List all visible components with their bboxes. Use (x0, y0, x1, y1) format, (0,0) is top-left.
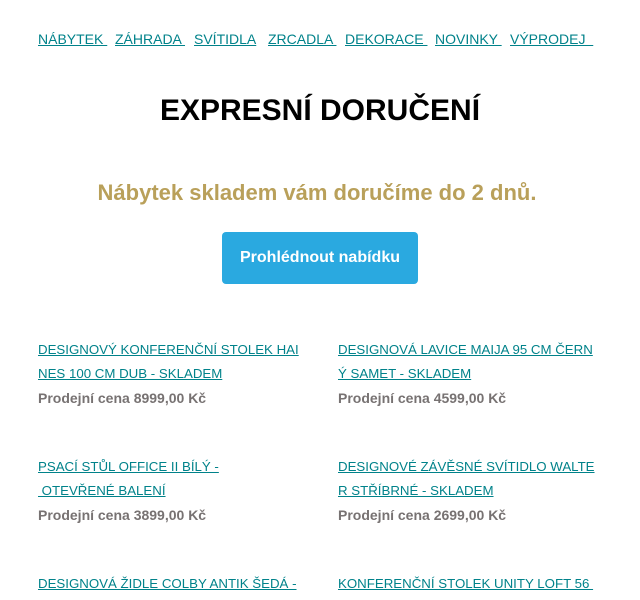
product: lavice Maija (338, 342, 593, 406)
navigation menu: VÝPRODEJ (510, 31, 585, 47)
product: konferenční stolek Hai (38, 342, 299, 406)
navigation menu: ZRCADLA (268, 31, 333, 47)
product: psací stůl Office: Prodejní cena 3899,00 Kč (38, 507, 206, 523)
navigation menu: SVÍTIDLA (194, 31, 256, 47)
product: psací stůl Office: PSACÍ STŮL OFFICE II BÍLÝ - (38, 459, 219, 474)
button: Prohlédnout nabídku (240, 249, 400, 266)
product: psací stůl Office: OTEVŘENÉ BALENÍ (42, 483, 166, 498)
product: závěsné svítidlo Walter: R STŘÍBRNÉ - SKLADEM (338, 483, 494, 498)
navigation menu: NOVINKY (435, 31, 498, 47)
product: konferenční stolek Hai: Prodejní cena 8999,00 Kč (38, 390, 206, 406)
product: lavice Maija: Prodejní cena 4599,00 Kč (338, 390, 506, 406)
product: závěsné svítidlo Walter: Prodejní cena 2699,00 Kč (338, 507, 506, 523)
subtitle: Nábytek skladem vám doručíme do 2 dnů. (98, 180, 536, 205)
navigation menu: DEKORACE (345, 31, 424, 47)
product: židle Colby: DESIGNOVÁ ŽIDLE COLBY ANTIK ŠEDÁ - (38, 576, 297, 591)
product: psací stůl Office (38, 459, 219, 523)
navigation menu: ZÁHRADA (115, 31, 181, 47)
product: závěsné svítidlo Walter (338, 459, 595, 523)
button (222, 232, 418, 284)
navigation menu (38, 31, 594, 47)
product: lavice Maija: DESIGNOVÁ LAVICE MAIJA 95 CM ČERN (338, 342, 593, 357)
title: EXPRESNÍ DORUČENÍ (160, 94, 480, 127)
product: závěsné svítidlo Walter: DESIGNOVÉ ZÁVĚSNÉ SVÍTIDLO WALTE (338, 459, 595, 474)
product: konferenční stolek Unity: KONFERENČNÍ STOLEK UNITY LOFT 56 (338, 576, 589, 591)
product: konferenční stolek Hai: NES 100 CM DUB - SKLADEM (38, 366, 222, 381)
product: lavice Maija: Ý SAMET - SKLADEM (338, 366, 471, 381)
navigation menu: NÁBYTEK (38, 31, 103, 47)
product: konferenční stolek Hai: DESIGNOVÝ KONFERENČNÍ STOLEK HAI (38, 342, 299, 357)
